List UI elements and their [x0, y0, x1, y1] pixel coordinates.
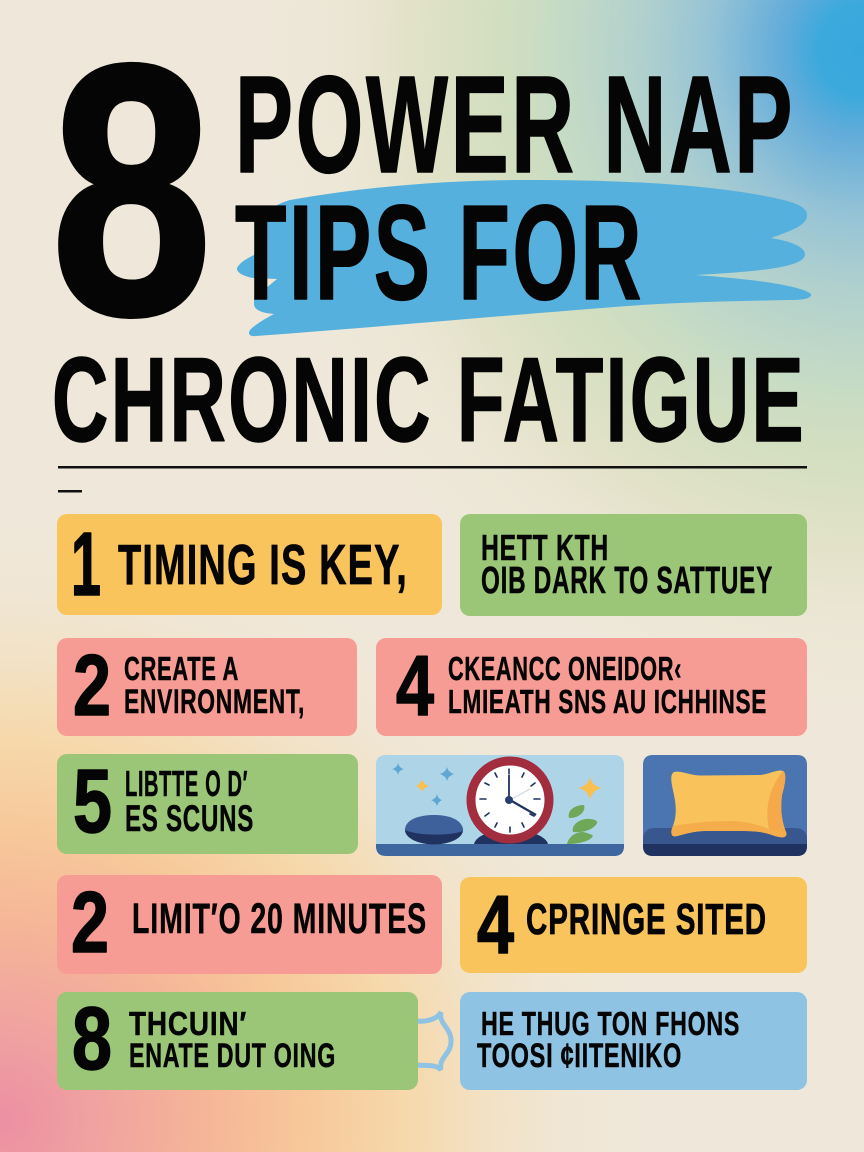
leaves: [567, 805, 597, 844]
card number: 4: [396, 639, 434, 734]
card: yellow four: [460, 877, 807, 973]
sparkles: [392, 763, 602, 806]
card number: 2: [73, 638, 111, 734]
card text: ENATE DUT OING: [129, 1037, 336, 1075]
title block: [51, 0, 811, 467]
card: timing is key: [57, 514, 442, 615]
cushion: [643, 828, 807, 844]
stone: [405, 816, 463, 844]
card text: CREATE A: [124, 650, 239, 687]
card text: TIMING IS KEY,: [118, 533, 408, 597]
card text: LIMIT′O 20 MINUTES: [132, 895, 427, 943]
card: limit to 20 minutes: [57, 875, 442, 974]
illustration: pillow: [643, 755, 807, 856]
illustration: clock scene: [376, 755, 624, 856]
card text: ES SCUNS: [125, 798, 254, 839]
card text: CKEANCC ONEIDOR‹: [448, 650, 682, 687]
card: green five: [57, 752, 358, 854]
clock base: [474, 830, 548, 844]
card text: HE THUG TON FHONS: [481, 1005, 740, 1042]
card: green eight: [57, 988, 418, 1090]
card number: 2: [71, 875, 109, 971]
card: pink wide: [376, 638, 807, 736]
card number: 8: [72, 988, 112, 1088]
card text: ENVIRONMENT,: [124, 683, 305, 721]
card number: 4: [477, 878, 514, 971]
card: green top right: [460, 514, 807, 616]
blue brush stroke: [237, 180, 811, 336]
card: create environment: [57, 638, 357, 736]
card: blue: [460, 992, 807, 1090]
pillow body: [671, 771, 786, 837]
card text: TOOSI ¢IITENIKO: [477, 1037, 682, 1075]
card text: HETT KTH: [481, 527, 609, 568]
shelf: [376, 844, 624, 856]
card text: THCUIN′: [129, 1005, 247, 1042]
big number 8: 8: [51, 0, 212, 389]
connector between cards: [416, 1012, 451, 1070]
card number: 1: [71, 515, 101, 615]
clock: [471, 761, 549, 839]
card number: 5: [73, 752, 112, 852]
card text: LIBTTE O D′: [125, 763, 248, 804]
